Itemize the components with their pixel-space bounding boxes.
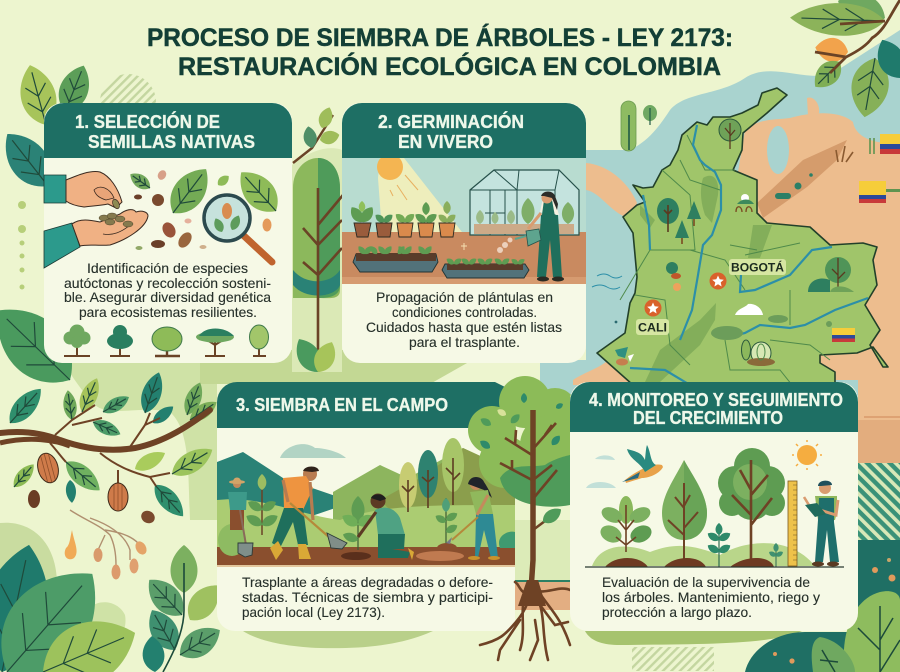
kneeling gardener <box>358 494 414 560</box>
panel: 2 nursery germination <box>342 103 586 363</box>
illustration: greenhouse and seedlings <box>342 154 586 284</box>
bottom-left plant <box>139 545 227 672</box>
roots <box>480 575 570 660</box>
pots <box>347 201 458 237</box>
map trees <box>615 119 854 366</box>
title: RESTAURACIÓN ECOLÓGICA EN COLOMBIA <box>178 51 721 81</box>
background blobs: left and centre <box>0 148 802 672</box>
bird <box>622 445 663 483</box>
gardener with shovel <box>270 466 347 560</box>
flag upper right <box>870 134 900 154</box>
plant stage 1 <box>598 496 654 552</box>
body text: Evaluación de la supervivencia de <box>602 574 810 590</box>
middle tree and branch <box>290 105 343 377</box>
panel: 4 monitoring and growth tracking <box>570 382 858 631</box>
heading: 2. GERMINACIÓN <box>378 111 524 132</box>
heading: 4. MONITOREO Y SEGUIMIENTO <box>589 390 843 410</box>
top-right branch with leaves <box>789 0 900 120</box>
body text: para ecosistemas resilientes. <box>79 304 257 320</box>
body text: protección a largo plazo. <box>602 604 752 620</box>
body text: Trasplante a áreas degradadas o defore- <box>242 574 493 590</box>
card header <box>44 103 292 158</box>
star marker: Bogotá <box>710 272 726 290</box>
seedling trays <box>353 238 529 278</box>
label: Bogotá: BOGOTÁ <box>731 260 784 274</box>
body text: stadas. Técnicas de siembra y participi- <box>242 589 493 605</box>
soil mounds and ground line <box>585 558 844 567</box>
greenhouse <box>470 170 579 235</box>
heading: SEMILLAS NATIVAS <box>88 132 255 152</box>
body text: autóctonas y recolección sosteni- <box>64 275 271 291</box>
panel: 1 selection of native seeds <box>44 103 292 363</box>
illustration: hands and seeds <box>44 160 287 268</box>
farmer with hat <box>228 478 253 557</box>
gardener with watering can <box>515 192 564 282</box>
small plants <box>706 523 784 567</box>
plant stage 3 <box>718 448 785 560</box>
body text: Cuidados hasta que estén listas <box>366 319 562 335</box>
sun <box>792 440 822 470</box>
body text: los árboles. Mantenimiento, riego y <box>602 589 820 605</box>
label: Cali: CALI <box>638 320 667 334</box>
tree crown <box>468 376 580 507</box>
illustration: growth stages and surveyor <box>585 440 844 567</box>
heading: 1. SELECCIÓN DE <box>75 111 220 132</box>
card body <box>217 428 515 631</box>
body text: condiciones controladas. <box>392 304 537 320</box>
map of Colombia <box>592 88 888 395</box>
sea <box>540 30 900 420</box>
card body <box>570 382 858 631</box>
left branch with cacao pods <box>0 369 220 580</box>
card header <box>217 382 515 428</box>
flag right <box>859 181 900 203</box>
left side leaves <box>0 123 90 400</box>
ruler <box>788 481 797 566</box>
title: PROCESO DE SIEMBRA DE ÁRBOLES - LEY 2173: <box>147 23 733 52</box>
side dots <box>18 201 26 290</box>
heading: EN VIVERO <box>398 132 493 152</box>
bottom-left large leaves <box>0 538 147 672</box>
plant stage 2 <box>662 460 707 560</box>
body text: pación local (Ley 2173). <box>242 604 385 620</box>
flag on map <box>832 328 855 342</box>
panel: 3 field planting <box>217 382 515 631</box>
heading: DEL CRECIMIENTO <box>633 408 783 428</box>
background trees <box>244 438 464 535</box>
body text: ble. Asegurar diversidad genética <box>64 289 271 305</box>
body text: Identificación de especies <box>87 260 248 276</box>
heading: 3. SIEMBRA EN EL CAMPO <box>236 395 448 415</box>
surveyor <box>804 481 839 566</box>
seedling <box>340 496 464 561</box>
neighbouring land <box>573 98 900 470</box>
top-left leaves <box>13 60 97 130</box>
body text: para el trasplante. <box>409 334 520 350</box>
bottom-right teal blob with leaves <box>745 417 900 672</box>
body text: Propagación de plántulas en <box>376 289 553 305</box>
illustration: people planting <box>217 438 515 567</box>
small trees by the coast <box>621 101 657 151</box>
card header <box>342 103 586 158</box>
stripe circle top left <box>100 74 156 130</box>
star marker: Cali <box>644 300 662 316</box>
large tree with roots <box>468 376 580 660</box>
card body <box>44 103 292 363</box>
icons: tree species row <box>64 324 268 356</box>
card header <box>570 382 858 432</box>
card body <box>342 103 586 363</box>
gardener with rake <box>446 477 500 560</box>
